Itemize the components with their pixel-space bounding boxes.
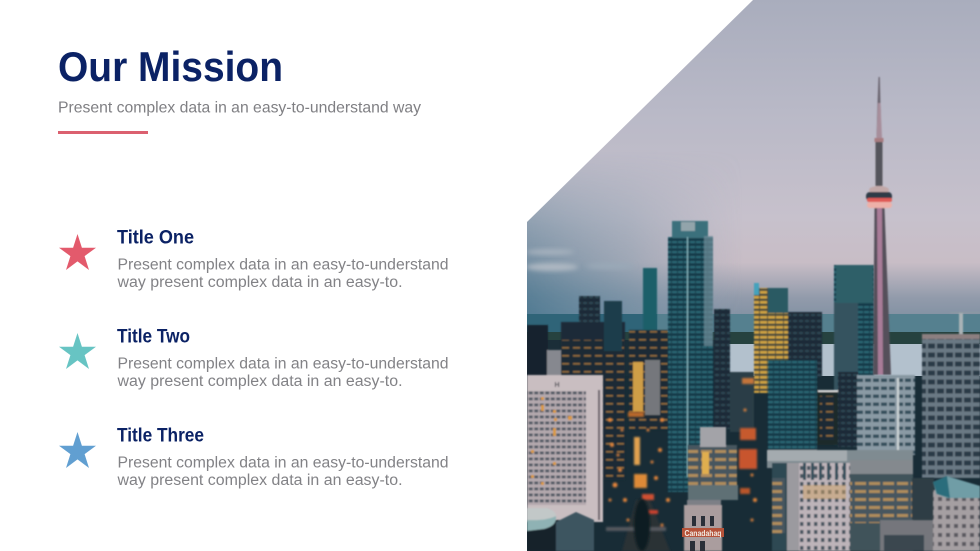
text block: title one description xyxy=(116,256,448,291)
gold and dark towers xyxy=(753,264,874,394)
Canadahaq building with sign: Canadahaq xyxy=(684,529,722,538)
dark street trees xyxy=(634,499,650,551)
text block: title one description: Present complex data in an easy-to-understand xyxy=(118,256,448,274)
CN Tower xyxy=(866,77,892,375)
mid street buildings xyxy=(687,427,738,508)
photo: Toronto skyline cut panel xyxy=(526,0,980,551)
lower right building cluster xyxy=(767,360,934,551)
dark city base xyxy=(527,340,980,551)
tall glass tower xyxy=(668,221,713,492)
text block: title two description: way present complex data in an easy-to. xyxy=(116,373,402,390)
title: Our Mission xyxy=(58,43,283,90)
harbour water and far shore xyxy=(527,314,980,380)
Canadahaq building with sign xyxy=(682,505,724,551)
list item: title one xyxy=(59,228,448,291)
hotel building xyxy=(527,375,603,522)
icon: teal star xyxy=(59,333,96,369)
hotel building: H xyxy=(554,382,560,389)
street lights xyxy=(606,378,757,531)
heading: title three: Title Three xyxy=(117,426,204,446)
bottom right rooftops xyxy=(880,476,980,551)
rounded rooftop block xyxy=(527,508,594,551)
text block: title two description: Present complex data in an easy-to-understand xyxy=(118,356,448,372)
text block: title three description xyxy=(116,454,448,489)
right side building and crane xyxy=(922,312,980,478)
skyline mid-ground buildings xyxy=(527,268,754,480)
text block: title one description: way present complex data in an easy-to. xyxy=(116,274,402,291)
accent underline xyxy=(58,131,148,134)
list item: title three xyxy=(59,426,448,489)
subtitle: Present complex data in an easy-to-understand way xyxy=(58,100,421,116)
road through the district xyxy=(622,500,670,551)
heading: title one: Title One xyxy=(117,228,194,248)
text block: title three description: way present complex data in an easy-to. xyxy=(116,472,402,489)
text block: title three description: Present complex data in an easy-to-understand xyxy=(118,454,448,472)
heading: title two: Title Two xyxy=(117,326,190,348)
icon: red star xyxy=(59,234,96,270)
icon: blue star xyxy=(59,432,96,468)
text block: title two description xyxy=(116,356,448,390)
list item: title two xyxy=(59,326,448,390)
sky xyxy=(526,0,980,320)
